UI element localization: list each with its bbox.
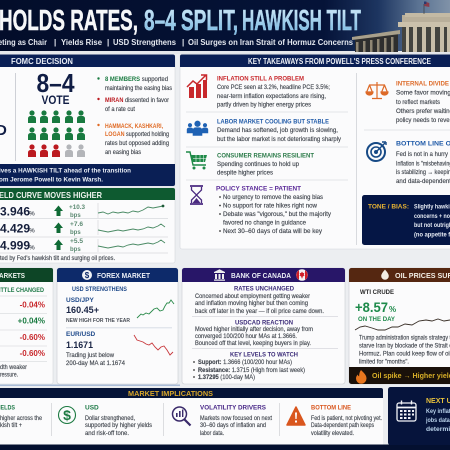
takeaway: policy stance — [216, 186, 331, 235]
takeaway: policy stance: POLICY STANCE = PATIENT — [216, 186, 302, 192]
oil commentary: limited for "months". — [359, 360, 409, 366]
vote breakdown text: of a rate cut — [105, 107, 135, 113]
takeaway: consumer: Spending continues to hold up — [217, 162, 300, 168]
block: key levels: Support: 1.3666 (100/200 hour MAs) — [198, 360, 292, 366]
callout: tone and bias — [362, 195, 450, 245]
heading: FOMC decision — [0, 54, 175, 67]
panel: next up — [388, 387, 450, 445]
icon: bank — [214, 269, 225, 281]
USD strengthens: USD STRENGTHENS — [72, 286, 128, 293]
panel: oil prices — [349, 268, 450, 384]
yield row 3 — [0, 239, 165, 253]
implication: volatility: 30–60 days of inflation and — [200, 423, 266, 429]
subtitle: Oil Surges on Iran Strait of Hormuz Concerns — [188, 38, 354, 47]
icon: shopping cart — [186, 152, 207, 170]
implication: yields: higher across the — [0, 416, 43, 422]
icon: dollar — [58, 406, 76, 424]
panel: forex market — [57, 268, 178, 384]
vote count: 8–4 — [36, 68, 75, 98]
index changes: -0.60% — [20, 349, 45, 358]
panel: equity markets — [0, 268, 53, 384]
implication: volatility — [200, 404, 272, 437]
panel: FOMC decision — [0, 54, 175, 186]
vote count: VOTE — [42, 93, 70, 107]
heading: Bank of Canada: BANK OF CANADA — [231, 271, 291, 280]
callout: hawkish tilt: om Jerome Powell to Kevin Warsh. — [0, 176, 103, 184]
vote breakdown text — [97, 77, 172, 156]
takeaway: internal divide — [396, 80, 450, 124]
block: rates unchanged: and inflation moving higher but then coming — [195, 301, 308, 307]
icon: warning triangle — [287, 407, 305, 425]
takeaway: bottom line: and data-dependent — [396, 179, 450, 185]
implication: yields — [0, 404, 43, 429]
title: 8–4 SPLIT, — [144, 5, 238, 37]
takeaway: policy stance: No urgency to remove the easing bias — [223, 195, 323, 201]
yield row 1: 3.946 — [0, 206, 30, 218]
vote icons — [28, 110, 85, 157]
block: rates unchanged: Concerned about employment getting weaker — [195, 294, 310, 300]
block: rates unchanged: RATES UNCHANGED — [234, 286, 294, 292]
implication: yields: kish tilt + — [0, 423, 22, 429]
icon: chart rising — [187, 75, 207, 98]
WTI crude change: % — [389, 305, 396, 314]
yield row 2: 4.429 — [0, 224, 30, 236]
takeaway: inflation: partly driven by higher energy prices — [217, 102, 311, 108]
heading: FOMC decision: FOMC DECISION — [11, 57, 73, 66]
block: rates unchanged — [195, 286, 324, 315]
oil commentary: Hormuz. Plan could keep flow of oil — [359, 352, 450, 358]
takeaway: bottom line: Fed is not in a hurry — [396, 152, 448, 158]
icon: Canadian flag — [296, 269, 308, 281]
callout: tone and bias: TONE / BIAS: — [368, 204, 409, 210]
panel: yield curve — [0, 188, 175, 263]
block: USDCAD reaction: USDCAD REACTION — [235, 320, 293, 326]
yield row 1: +10.3 — [69, 205, 86, 211]
USD/JPY: 160.45+ — [66, 305, 99, 316]
yield row 2: % — [29, 228, 35, 234]
block: key levels: Resistance: 1.3715 (High from last week) — [198, 368, 305, 374]
subtitle: | — [54, 38, 56, 47]
markets note: ressure. — [0, 372, 18, 378]
implication: volatility: labor data. — [200, 431, 224, 437]
block: key levels: KEY LEVELS TO WATCH — [230, 352, 298, 358]
takeaway: consumer: despite higher prices — [217, 170, 273, 176]
implication: USD: Dollar strengthened, — [85, 416, 135, 422]
panel: Bank of Canada — [182, 268, 345, 384]
implication: volatility: VOLATILITY DRIVERS — [200, 404, 267, 412]
takeaway: policy stance: favored no change in guidance — [223, 220, 307, 226]
vote breakdown text: an easing bias — [105, 150, 141, 156]
EUR/USD: Trading just below — [66, 353, 115, 359]
icon: people — [187, 121, 208, 136]
block: USDCAD reaction: converged 100/200 hour MAs at 1.3666. — [195, 334, 297, 340]
callout: hawkish tilt — [0, 164, 175, 186]
implication: bottom line: volatility elevated. — [311, 431, 354, 437]
oil commentary — [359, 336, 450, 366]
yield row 2 — [0, 222, 165, 236]
takeaway: policy stance: No support for rate hikes right now — [223, 204, 318, 210]
USD/JPY: USD/JPY — [66, 297, 94, 304]
block: USDCAD reaction: Bounced off that level, keeping buyers in play. — [195, 341, 311, 347]
takeaway: bottom line — [396, 140, 450, 185]
takeaway: policy stance: Next 30–60 days of data will be key — [223, 229, 322, 235]
heading: forex market: FOREX MARKET — [97, 271, 150, 280]
vote breakdown text: MIRAN dissented in favor — [105, 98, 169, 104]
takeaway: labor market — [217, 118, 341, 143]
implication: USD: and risk-off tone. — [85, 431, 129, 437]
takeaway: labor market: but the labor market is not deteriorating sharply — [217, 137, 341, 143]
icon: flame — [356, 370, 366, 384]
heading: yield curve moves higher — [0, 188, 175, 200]
takeaway: policy stance: Debate was "vigorous," but the majority — [223, 212, 331, 218]
index changes: -0.60% — [20, 333, 45, 342]
implication: USD — [85, 404, 152, 437]
yield row 3: 4.999 — [0, 240, 30, 252]
EUR/USD: 200-day MA at 1.1674 — [66, 361, 126, 367]
icon: hourglass — [190, 186, 203, 204]
implication: bottom line: Data-dependent path keeps — [311, 423, 374, 429]
yield footnote: ted by Fed's hawkish tilt and surging oil prices. — [0, 256, 115, 262]
bottom strip — [0, 444, 450, 450]
block: USDCAD reaction: Moved higher initially after decision, away from — [195, 327, 313, 333]
vote breakdown text: 8 MEMBERS supported — [105, 77, 168, 83]
implication: USD: USD — [85, 404, 99, 412]
title — [0, 5, 361, 37]
takeaway: labor market: LABOR MARKET COOLING BUT STABLE — [217, 118, 329, 126]
yield row 1: bps — [70, 213, 81, 219]
WTI crude change: ON THE DAY — [358, 316, 396, 323]
icon: dollar: $ — [63, 407, 71, 423]
implication: volatility: Markets now focused on next — [200, 416, 272, 422]
heading: forex market: $ — [85, 271, 90, 280]
WTI crude change — [355, 289, 396, 323]
EUR/USD — [66, 331, 173, 367]
vote breakdown text: LOGAN supported holding — [105, 132, 169, 138]
subtitle: | — [107, 38, 109, 47]
block: key levels — [193, 352, 305, 381]
next up text — [425, 398, 450, 433]
heading: yield curve moves higher: ELD CURVE MOVES HIGHER — [0, 191, 102, 200]
icon: target — [367, 142, 386, 161]
header banner — [0, 0, 450, 54]
implication: bottom line — [311, 404, 382, 437]
index changes: -0.04% — [20, 300, 45, 310]
takeaway: inflation — [217, 76, 330, 108]
takeaway: consumer — [217, 152, 315, 176]
heading: market implications — [0, 388, 383, 398]
little changed label: ITTLE CHANGED — [0, 287, 44, 294]
EUR/USD: 1.1671 — [66, 340, 94, 351]
EUR/USD: EUR/USD — [66, 331, 96, 338]
subtitle: Yields Rise — [61, 38, 103, 47]
subtitle: | — [182, 38, 184, 47]
takeaway: consumer: CONSUMER REMAINS RESILIENT — [217, 152, 315, 160]
icon: calendar — [397, 400, 416, 421]
index changes: +0.04% — [18, 316, 45, 326]
WTI crude change: +8.57 — [355, 299, 388, 315]
block: rates unchanged: back off later in the year — if oil price came down. — [195, 309, 324, 315]
block: key levels: 1.37295 (100-day MA) — [198, 375, 255, 381]
yield row 1 — [0, 205, 164, 219]
heading: key takeaways — [180, 54, 450, 67]
takeaway: inflation: INFLATION STILL A PROBLEM — [217, 76, 304, 82]
panel: key takeaways — [180, 54, 450, 249]
implication: USD: supported by higher yields — [85, 423, 152, 429]
yield row 3: % — [29, 244, 35, 252]
vote breakdown text: maintaining the easing bias — [105, 86, 172, 92]
yield row 1: % — [29, 210, 35, 218]
takeaway: internal divide: to reflect markets — [396, 100, 440, 106]
title: HAWKISH TILT — [242, 5, 361, 37]
heading: Bank of Canada — [182, 268, 345, 282]
block: USDCAD reaction — [195, 320, 313, 347]
implication: bottom line: Fed is patient, not pivoting yet. — [311, 416, 382, 422]
vote breakdown text: rates but opposed adding — [105, 141, 169, 147]
icon: scales — [366, 82, 388, 98]
yield row 3: bps — [70, 247, 81, 253]
heading: market implications: MARKET IMPLICATIONS — [128, 389, 213, 398]
WTI crude change: WTI CRUDE — [360, 289, 395, 296]
USD/JPY: NEW HIGH FOR THE YEAR — [66, 318, 130, 324]
panel: market implications — [0, 388, 383, 445]
markets note: dth weaker — [0, 365, 27, 371]
takeaway: inflation: Core PCE seen at 3.2%, headline PCE 3.5%; — [217, 85, 330, 91]
takeaway: labor market: Demand has softened, job growth is slowing, — [217, 128, 338, 134]
heading: forex market — [57, 268, 178, 282]
yield row 3: +5.5 — [70, 239, 84, 245]
icon: oil drop — [381, 270, 389, 280]
USD/JPY — [66, 297, 174, 324]
illustration: Federal Reserve building — [352, 2, 450, 52]
subtitle: USD Strengthens — [113, 38, 177, 47]
title: HOLDS RATES, — [0, 5, 138, 37]
yield row 2: bps — [70, 230, 81, 236]
implication: bottom line: BOTTOM LINE — [311, 404, 352, 412]
oil sparkline — [355, 319, 450, 330]
yield row 2: +7.6 — [70, 222, 84, 228]
markets note — [0, 365, 27, 378]
subtitle — [0, 38, 354, 47]
index changes — [18, 300, 45, 358]
takeaway: inflation: near-term inflation expectations are rising, — [217, 94, 326, 100]
callout: hawkish tilt: ives a HAWKISH TILT ahead of the transition — [0, 168, 131, 174]
vote breakdown text: HAMMACK, KASHKARI, — [105, 124, 163, 130]
icon: magnifier with chart — [172, 407, 190, 426]
